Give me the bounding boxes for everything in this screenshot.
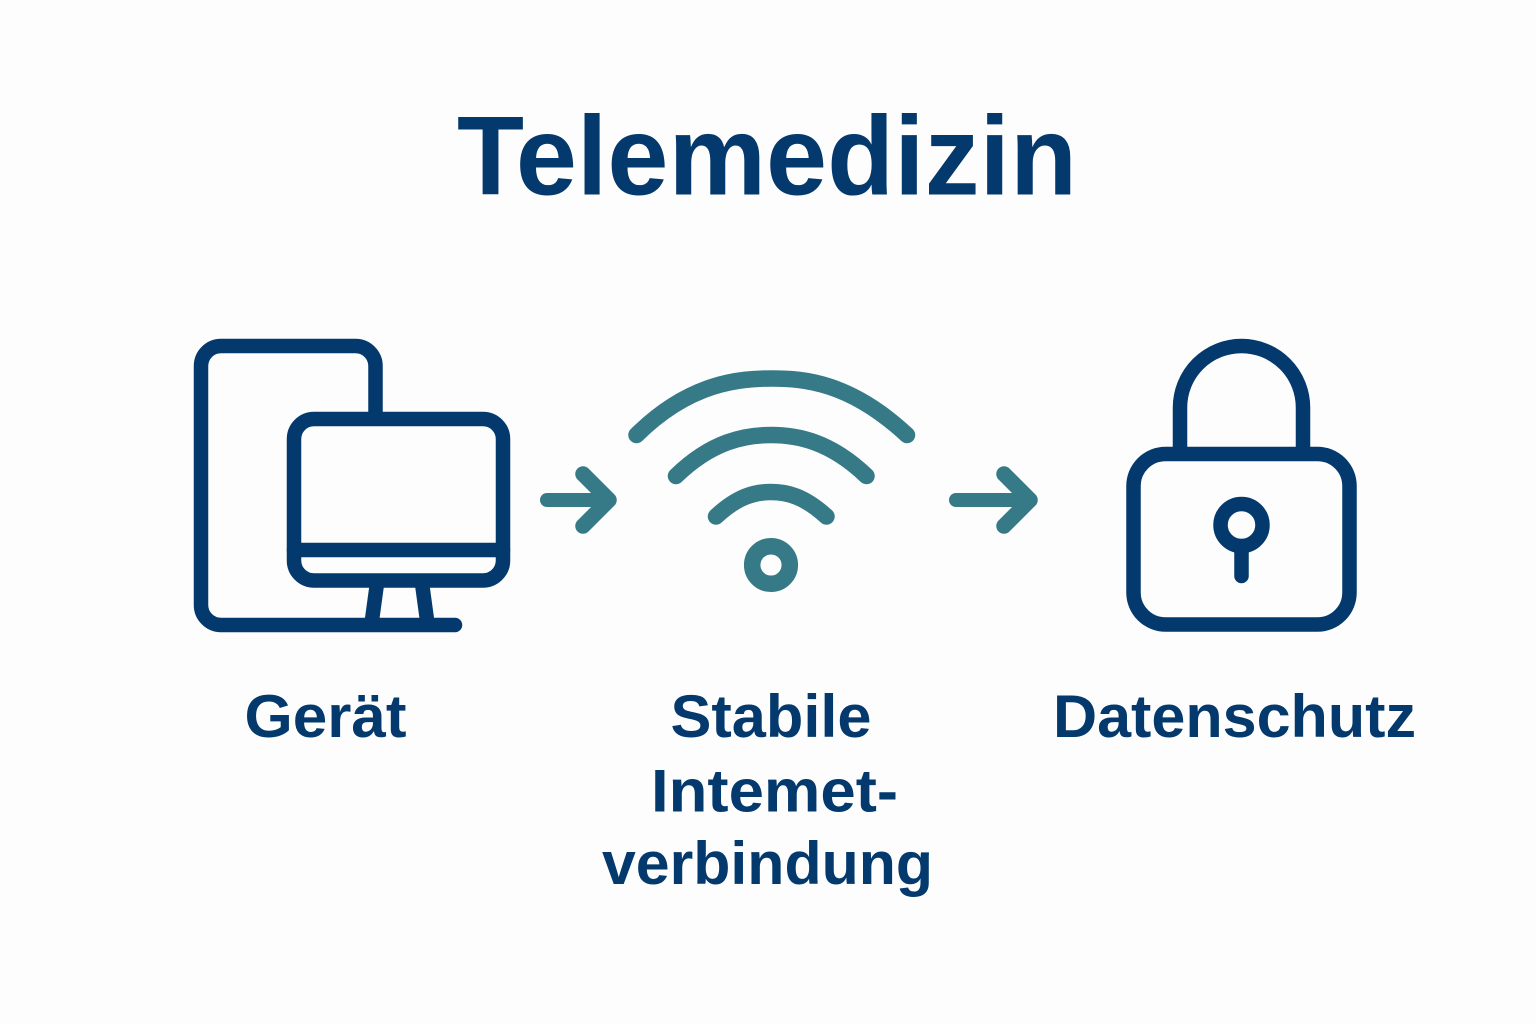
arrow head: [583, 474, 609, 526]
icon: phone and desktop monitor: [201, 346, 503, 625]
arrow head: [1004, 474, 1030, 526]
keyhole ring: [1220, 504, 1262, 546]
arrow: device to connection: [547, 474, 609, 526]
phone outline: [201, 346, 455, 625]
wifi inner arc: [716, 492, 826, 516]
arrow: connection to data protection: [956, 474, 1030, 526]
monitor screen: [294, 419, 503, 580]
label: Gerät: Gerät: [244, 683, 407, 750]
label line 2: Intemet-: [651, 758, 898, 824]
title: Telemedizin: [457, 94, 1077, 218]
lock shackle: [1180, 346, 1303, 452]
monitor stand: [372, 587, 427, 620]
label line 3: verbindung: [602, 830, 933, 897]
arrow shaft: [956, 493, 1026, 507]
arrow shaft: [547, 493, 606, 507]
wifi outer arc: [636, 378, 907, 435]
label line 1: Stabile: [670, 683, 872, 750]
icon: padlock: [1134, 346, 1350, 624]
icon: wifi signal: [636, 378, 907, 584]
label: Datenschutz: Datenschutz: [1053, 683, 1416, 750]
monitor chin divider: [294, 543, 503, 557]
label: stable internet connection: [602, 683, 933, 897]
keyhole stem: [1234, 547, 1249, 576]
lock body: [1134, 454, 1350, 624]
wifi middle arc: [676, 435, 866, 476]
wifi dot: [752, 546, 790, 584]
